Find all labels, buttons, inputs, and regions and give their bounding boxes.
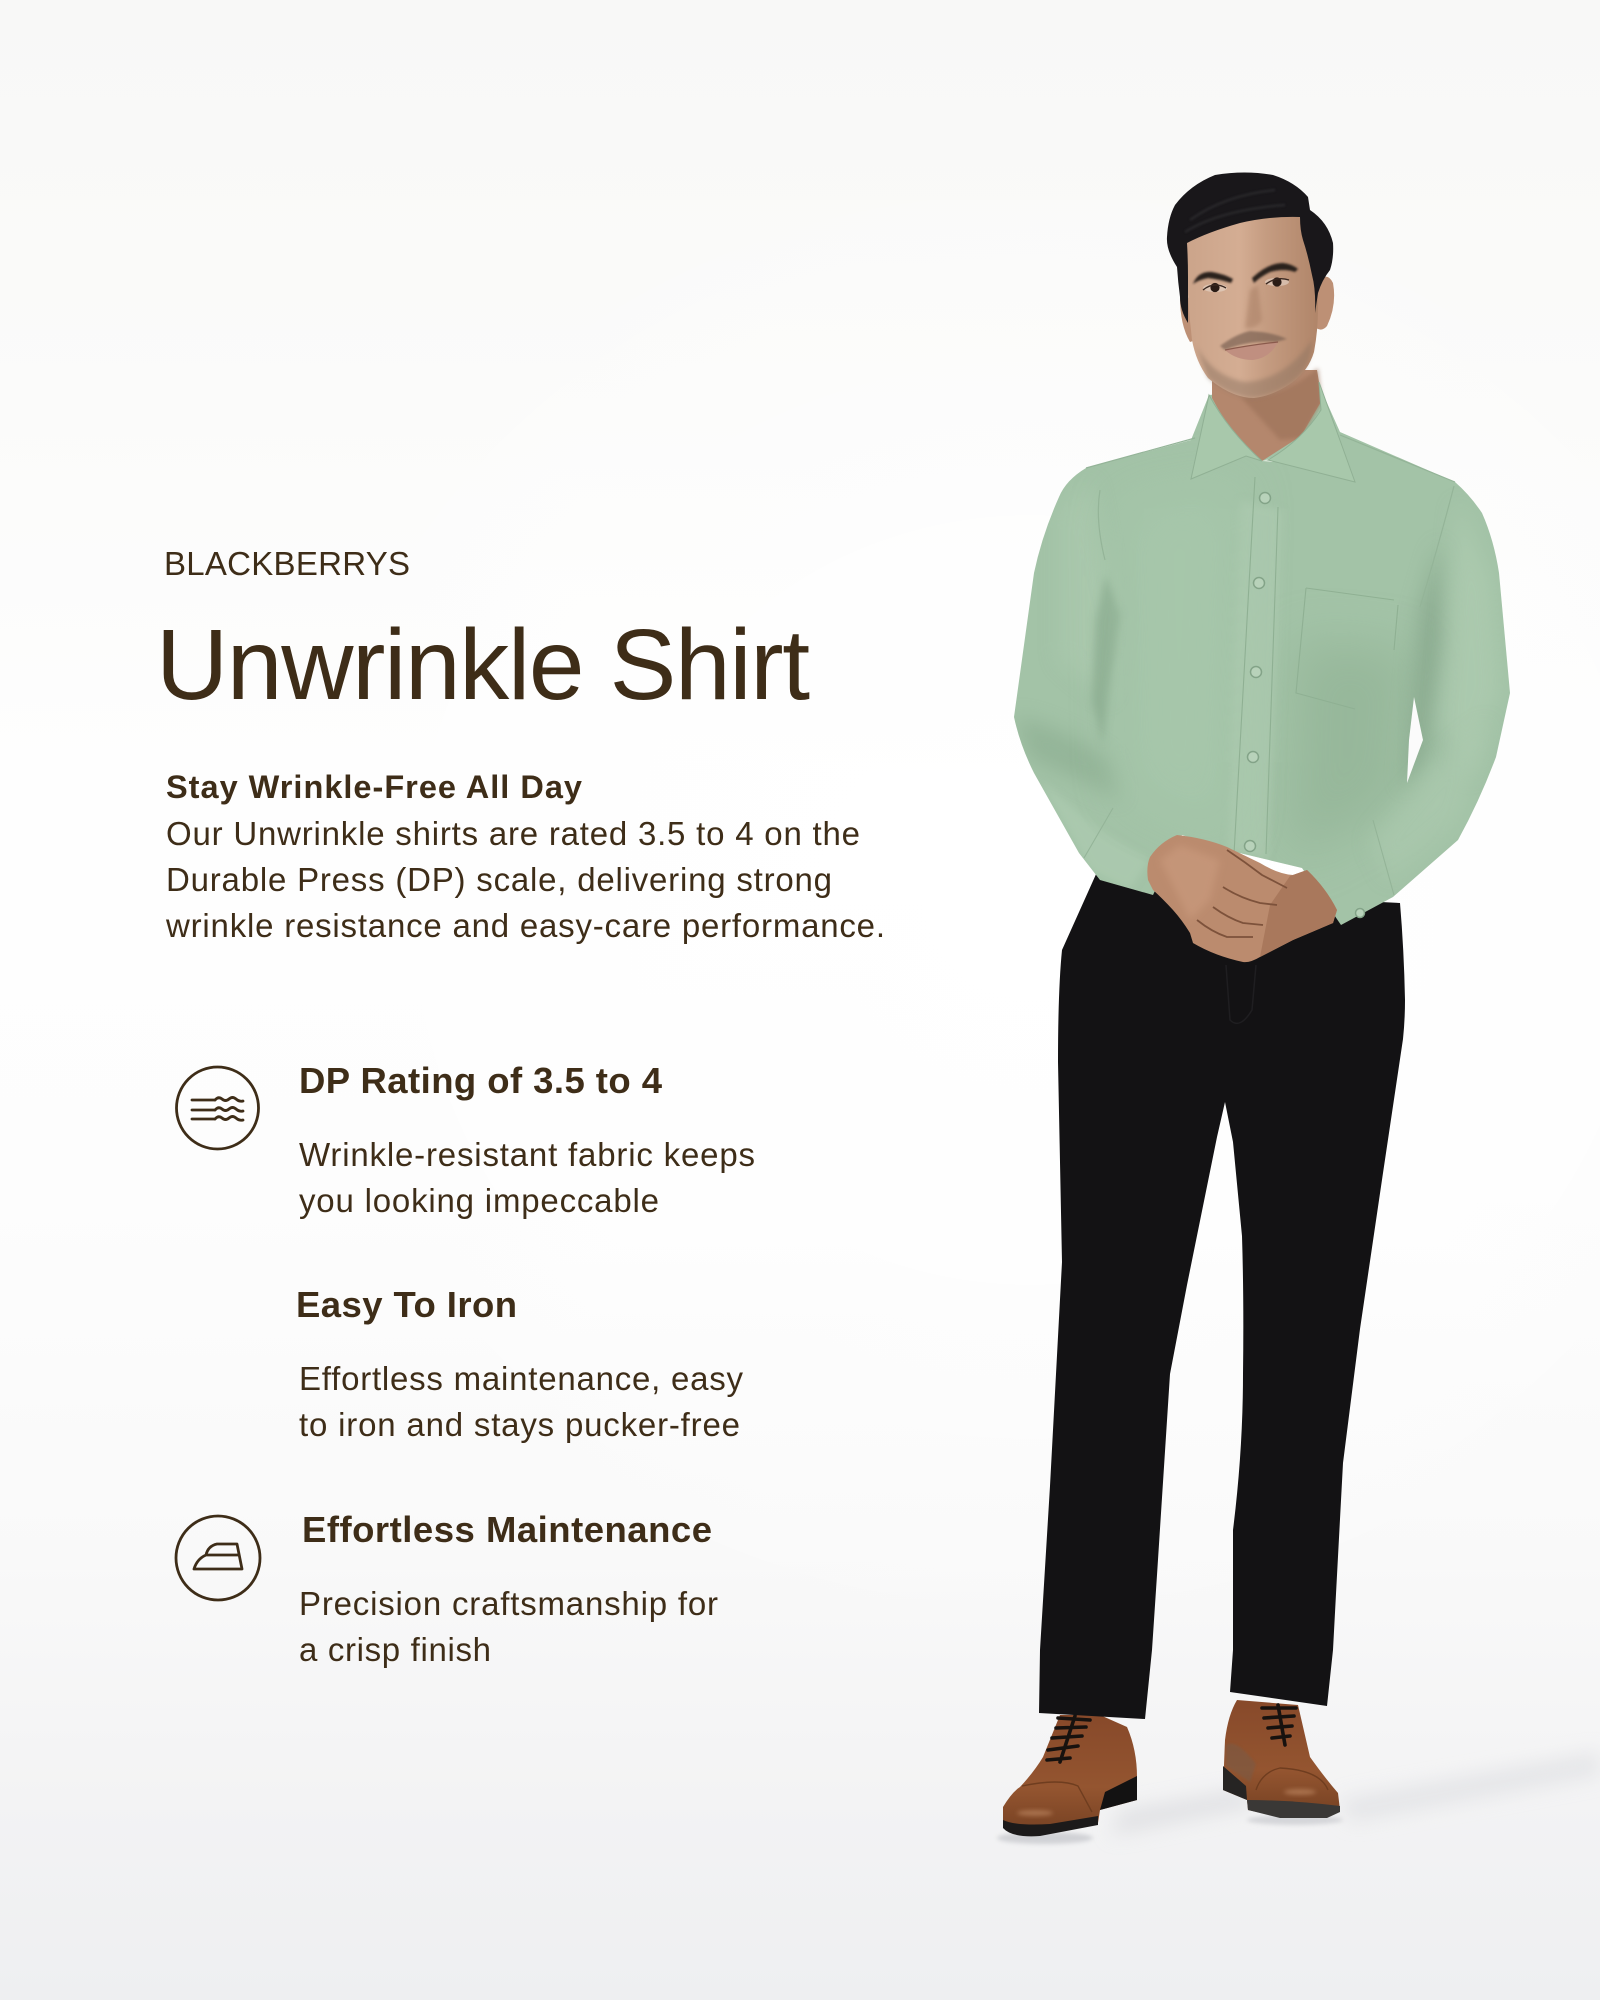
intro text block: Stay Wrinkle-Free All Day [166,769,582,805]
feature: effortless maintenance: Precision craftsmanship for [299,1585,718,1622]
feature: DP rating: DP Rating of 3.5 to 4 [299,1060,663,1101]
shoe: right [1223,1700,1340,1818]
intro text block: Durable Press (DP) scale, delivering strong [166,861,832,898]
ears [1180,277,1334,342]
feature: DP rating: you looking impeccable [299,1182,659,1219]
icon: wrinkle-free waves [176,1067,258,1149]
intro text block: Our Unwrinkle shirts are rated 3.5 to 4 on the [166,815,860,852]
feature: easy to iron: Easy To Iron [296,1284,517,1325]
shoe: left [1003,1715,1137,1836]
feature: effortless maintenance: Effortless Maintenance [302,1509,712,1550]
head [1167,172,1334,398]
face [1187,213,1318,398]
hair [1167,172,1333,323]
icon: iron [176,1516,260,1600]
floor shadows [997,1752,1600,1844]
neck [1212,368,1322,462]
feature: effortless maintenance: a crisp finish [299,1631,491,1668]
feature: easy to iron: to iron and stays pucker-free [299,1406,740,1443]
collar [1191,382,1355,482]
yoke and sleeve seams [1086,435,1455,607]
shirt shading [1014,480,1500,890]
belt detail [1095,858,1134,886]
hands [1147,835,1337,962]
intro text block [165,769,885,944]
feature: DP rating: Wrinkle-resistant fabric keeps [299,1136,755,1173]
photo: man in green shirt [997,172,1600,1844]
intro text block: wrinkle resistance and easy-care performance. [165,907,885,944]
shirt buttons [1244,492,1364,918]
feature: effortless maintenance [299,1509,718,1668]
mouth [1225,342,1278,360]
title: Unwrinkle Shirt [156,609,810,721]
feature: DP rating [299,1060,755,1219]
brand name: BLACKBERRYS [164,545,410,582]
sleeve cuff seams [1084,808,1394,895]
nose [1245,285,1262,328]
brows [1193,263,1298,284]
hair highlights [1185,190,1285,232]
trousers [1039,872,1405,1719]
feature: easy to iron: Effortless maintenance, easy [299,1360,744,1397]
stubble shade [1196,340,1312,398]
shirt [1014,385,1510,925]
eyes [1203,284,1227,292]
feature: easy to iron [296,1284,744,1443]
moustache [1220,331,1287,350]
gap between arm and torso [1407,697,1423,783]
placket and pocket seams [1234,477,1398,854]
